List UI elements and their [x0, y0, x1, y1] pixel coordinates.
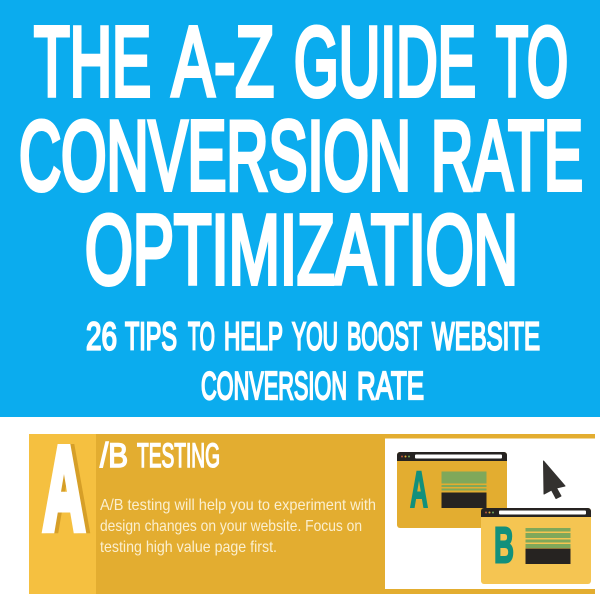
subtitle: RATE	[357, 365, 424, 408]
icon: browser window A: A	[410, 461, 428, 518]
subtitle: CONVERSION	[201, 365, 347, 408]
subtitle: HELP	[224, 316, 283, 358]
panel: A/B testing	[29, 423, 595, 594]
panel body text: testing high value page first.	[100, 539, 277, 556]
illustration frame	[385, 434, 595, 594]
subtitle: 26	[86, 316, 117, 358]
icon: browser window B	[481, 508, 591, 584]
icon: browser window A	[397, 452, 507, 528]
letter strip	[29, 434, 96, 594]
icon: browser window B: B	[494, 516, 514, 574]
subtitle: TIPS	[125, 316, 177, 358]
panel body text	[100, 497, 376, 556]
header background	[0, 0, 600, 417]
title: GUIDE	[294, 6, 476, 116]
panel body text: A/B testing will help you to experiment with	[100, 497, 376, 514]
panel heading: /B	[100, 437, 128, 475]
big letter A: A	[43, 423, 85, 555]
panel body text: design changes on your website. Focus on	[100, 518, 362, 535]
subtitle: BOOST	[347, 316, 422, 358]
subtitle: YOU	[292, 316, 338, 358]
subtitle	[86, 316, 540, 408]
panel background	[29, 434, 385, 594]
panel heading: TESTING	[137, 437, 220, 475]
panel heading	[100, 437, 220, 475]
title: A-Z	[172, 6, 274, 116]
panel: A/B testing: A	[47, 423, 89, 555]
icon: mouse cursor	[544, 461, 565, 498]
big letter A	[43, 423, 89, 555]
title: THE	[34, 6, 151, 116]
title	[19, 6, 583, 304]
subtitle: TO	[188, 316, 215, 358]
